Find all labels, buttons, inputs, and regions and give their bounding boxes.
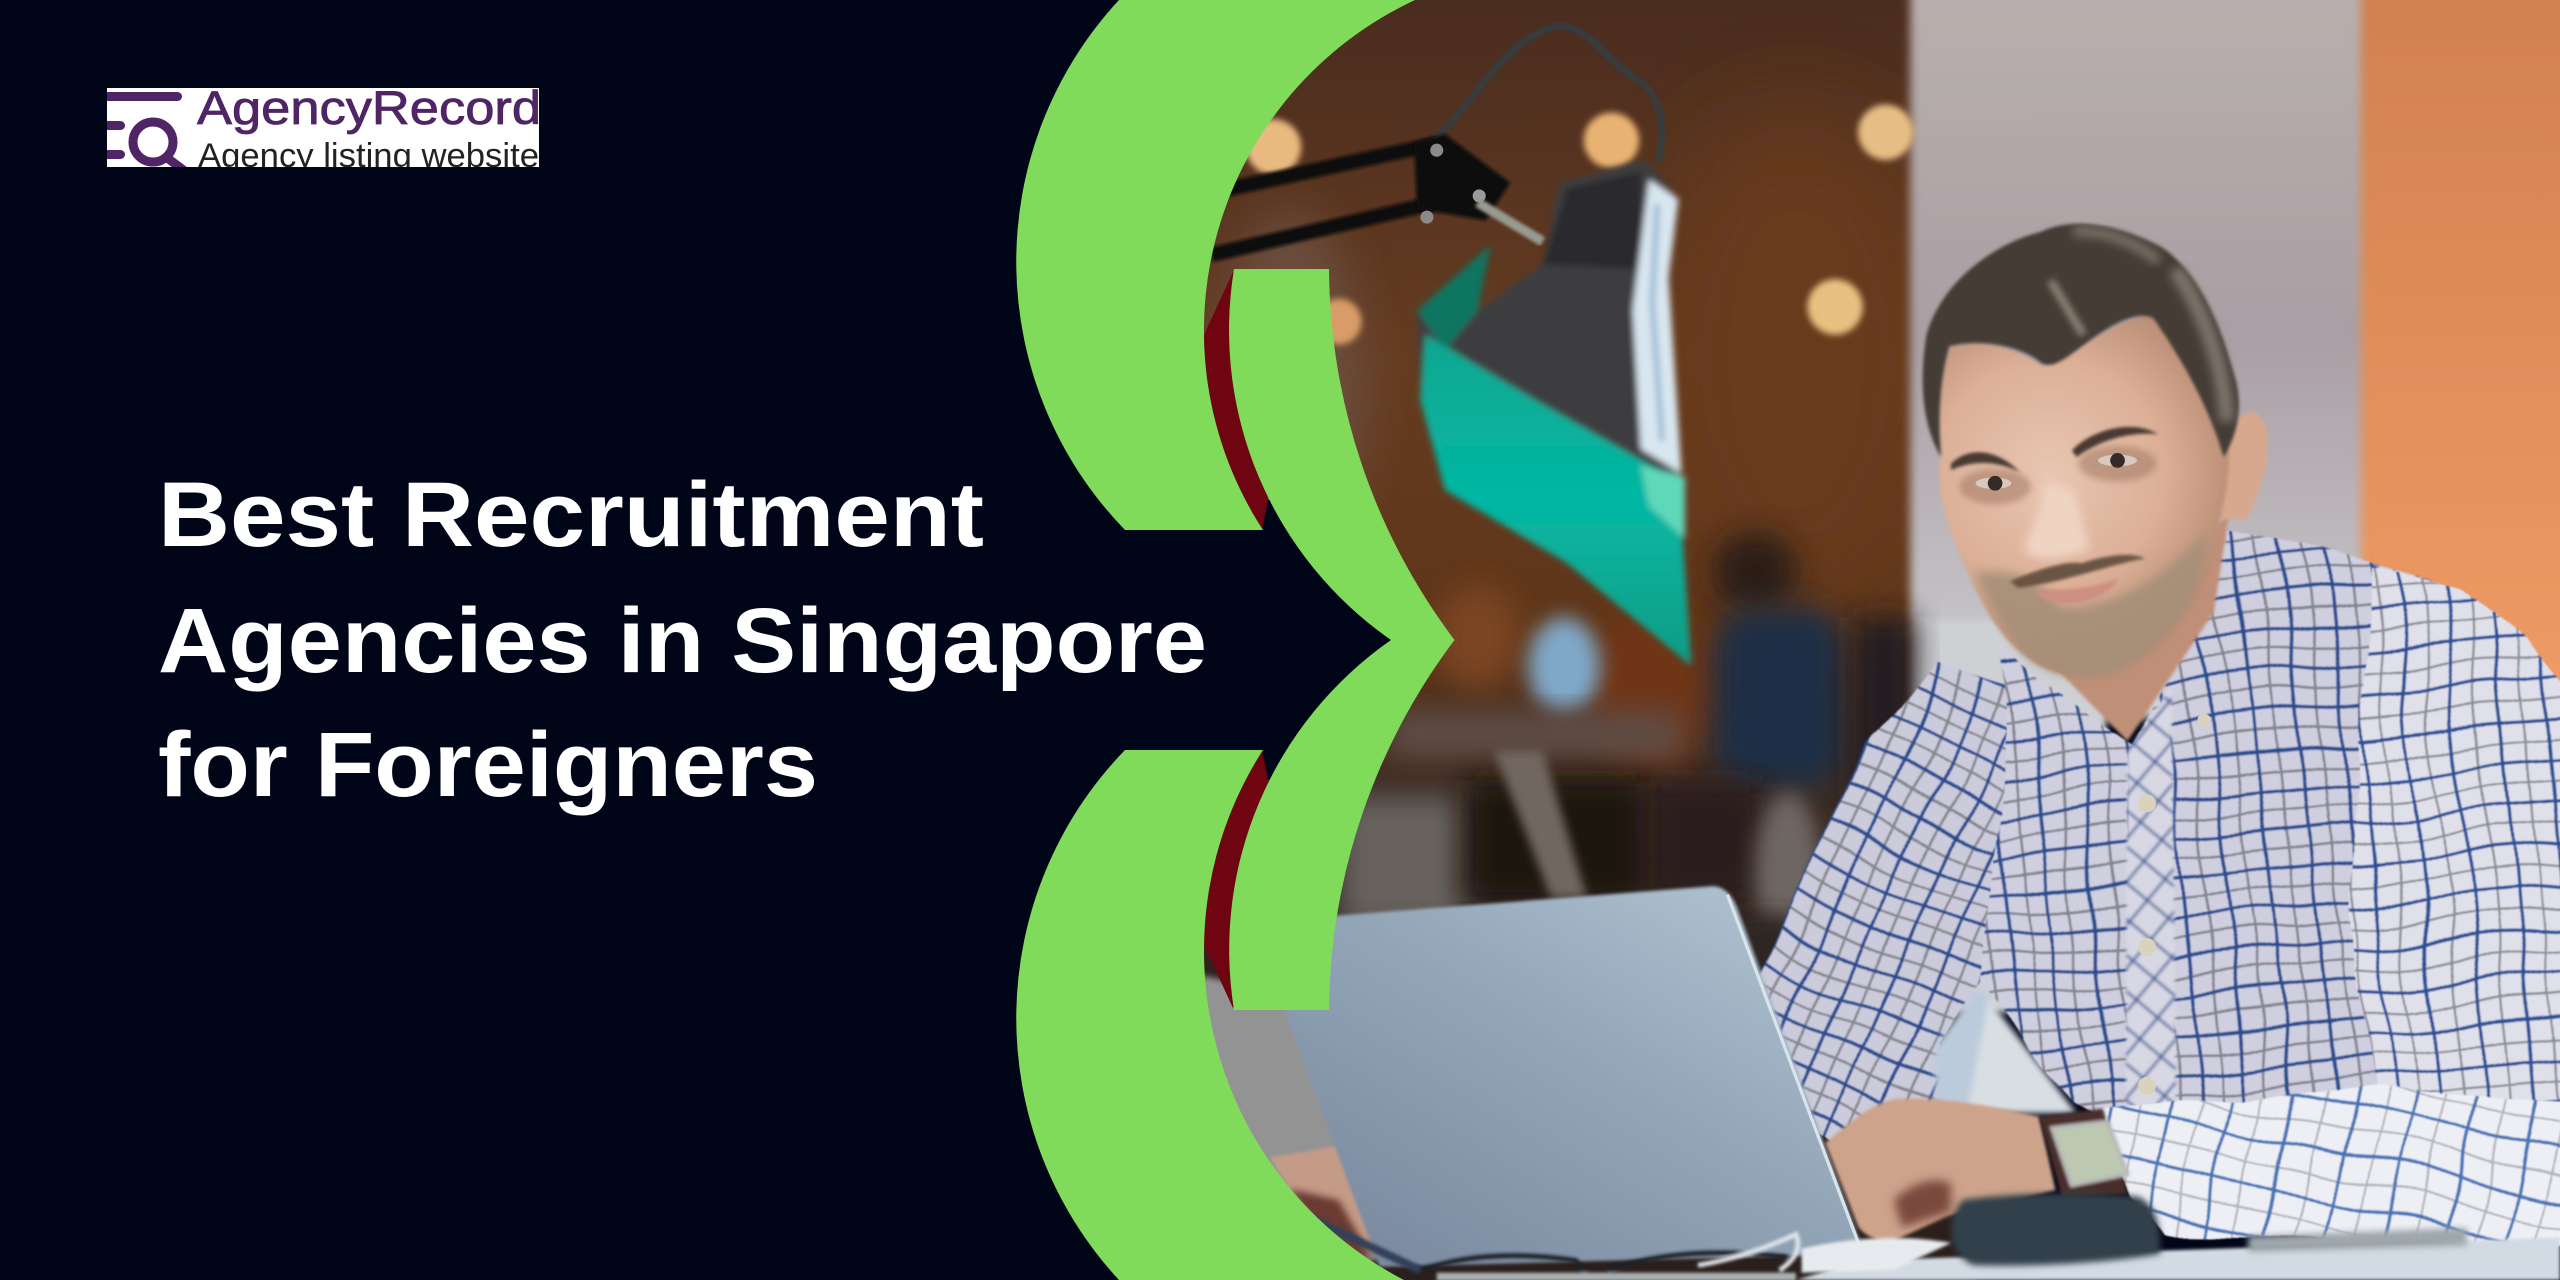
title: Agencies in Singapore [158, 590, 1207, 692]
dark notch behind central chevron [1100, 500, 1420, 780]
shirt placket with buttons [2126, 686, 2211, 1127]
man: left arm in checked shirt [1760, 661, 2016, 1151]
man: ear [2220, 412, 2268, 519]
title [158, 464, 1207, 816]
dark pouch on desk [1951, 1193, 2160, 1266]
logo wordmark: AgencyRecord [197, 81, 541, 134]
photo backdrop: blurred office [1127, 0, 2560, 1280]
man: shirt torso [1979, 527, 2560, 1117]
photo: man at laptop in office [1127, 0, 2560, 1280]
man: neck [2060, 518, 2230, 742]
logo icon: list and magnifier [107, 92, 187, 167]
man: hair [1923, 224, 2239, 457]
red crescent bottom [1180, 750, 1268, 1008]
man: face [1938, 313, 2229, 677]
glasses and cables [1306, 1216, 1943, 1280]
left hand [1270, 1146, 1376, 1265]
title: for Foreigners [158, 714, 818, 816]
laptop [1249, 886, 1864, 1267]
desk surface [1796, 1238, 2560, 1280]
green arc bottom [1016, 750, 1404, 1280]
rolled sleeve cuff [2103, 1089, 2560, 1244]
logo: AgencyRecord [107, 88, 539, 167]
desk lamp [1211, 26, 1691, 666]
green arc top [1016, 0, 1415, 530]
red crescent top [1180, 272, 1268, 530]
logo tagline: Agency listing website [198, 137, 539, 175]
desk left of laptop [1204, 972, 1378, 1264]
right hand [1825, 1099, 2056, 1241]
wristwatch [2039, 1109, 2127, 1197]
title: Best Recruitment [158, 464, 984, 566]
gap under arm [1935, 986, 2077, 1113]
bokeh lights [1246, 104, 1913, 344]
green central chevron [1229, 269, 1454, 1010]
phone on desk [2248, 1228, 2467, 1252]
